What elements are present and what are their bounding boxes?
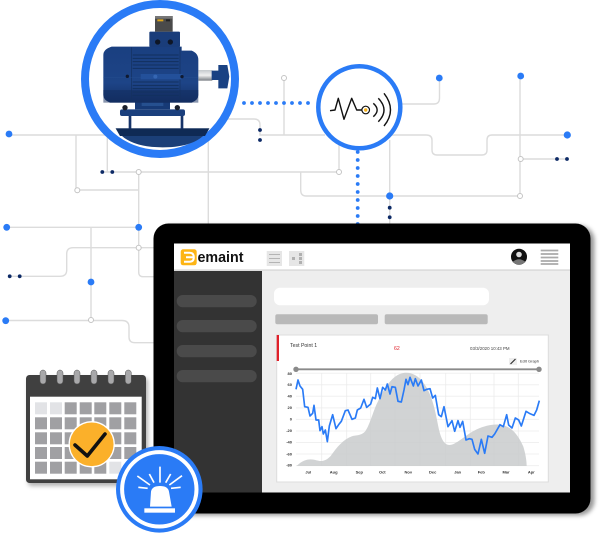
motor base plate bbox=[116, 128, 209, 147]
icon: alarm beacon badge bbox=[116, 446, 203, 533]
user avatar bbox=[511, 249, 527, 265]
x axis labels: Jul bbox=[305, 470, 311, 474]
chart card bbox=[277, 335, 548, 482]
icon: sensor circle bbox=[318, 66, 400, 148]
dotted connector: motor to sensor bbox=[244, 101, 314, 105]
motor body bbox=[103, 47, 198, 103]
x axis labels: Nov bbox=[405, 470, 413, 474]
x axis labels: Jan bbox=[454, 470, 462, 474]
line and area chart bbox=[296, 373, 539, 466]
dotted connector: sensor to tablet bbox=[356, 152, 360, 226]
motor shaft and coupling bbox=[198, 65, 229, 88]
menu icon bbox=[267, 251, 282, 266]
tablet screen bbox=[174, 244, 570, 492]
vibration sensor on motor bbox=[155, 16, 173, 32]
calendar cells bbox=[35, 402, 136, 474]
x axis labels: Mar bbox=[502, 470, 510, 474]
chart value: 62 bbox=[394, 346, 400, 352]
tablet frame bbox=[154, 224, 590, 514]
network node: open circles bbox=[75, 76, 523, 322]
y axis labels: -80 bbox=[286, 463, 293, 468]
x axis labels: Dec bbox=[429, 470, 437, 474]
y axis labels: 40 bbox=[288, 394, 293, 398]
blue line series bbox=[296, 377, 539, 454]
chart title: Test Point 1 bbox=[290, 343, 317, 349]
filter buttons bbox=[275, 314, 488, 324]
y axis labels: -20 bbox=[286, 428, 293, 433]
motor junction box bbox=[149, 32, 180, 47]
y axis labels: 80 bbox=[288, 371, 293, 376]
network node: navy dots bbox=[8, 128, 569, 278]
x axis labels: Apr bbox=[528, 470, 535, 474]
y axis labels bbox=[286, 371, 293, 468]
x axis labels: Oct bbox=[379, 470, 386, 474]
circuit network lines bbox=[6, 76, 567, 343]
chart date: 03/3/2020 10:43 PM bbox=[470, 346, 510, 351]
y axis labels: -40 bbox=[286, 440, 293, 445]
y axis labels: -60 bbox=[286, 451, 293, 456]
edit graph control: Edit Graph bbox=[520, 358, 539, 364]
logo mark bbox=[181, 249, 197, 265]
calendar check badge bbox=[69, 422, 114, 467]
icon: electric motor in circle bbox=[85, 4, 235, 154]
sidebar bbox=[174, 271, 262, 492]
x axis labels bbox=[305, 470, 535, 474]
motor legs and feet bbox=[120, 98, 185, 129]
tablet bbox=[154, 224, 590, 514]
search bar bbox=[274, 288, 489, 305]
logo wordmark: emaint bbox=[198, 250, 244, 266]
icon: calendar bbox=[26, 370, 146, 483]
calendar binding rings bbox=[40, 370, 131, 384]
range slider bbox=[293, 367, 542, 372]
x axis labels: Aug bbox=[330, 470, 338, 474]
x axis labels: Feb bbox=[478, 470, 485, 474]
y axis labels: 60 bbox=[288, 382, 293, 387]
edit graph control bbox=[509, 358, 539, 365]
network node: blue dots bbox=[2, 73, 571, 324]
y axis labels: 20 bbox=[288, 405, 293, 410]
hierarchy icon bbox=[289, 251, 304, 266]
y axis labels: 0 bbox=[290, 417, 293, 422]
x axis labels: Sep bbox=[356, 470, 364, 474]
app header bar bbox=[174, 244, 570, 270]
grey area series bbox=[297, 373, 527, 466]
list icon bbox=[541, 250, 558, 264]
